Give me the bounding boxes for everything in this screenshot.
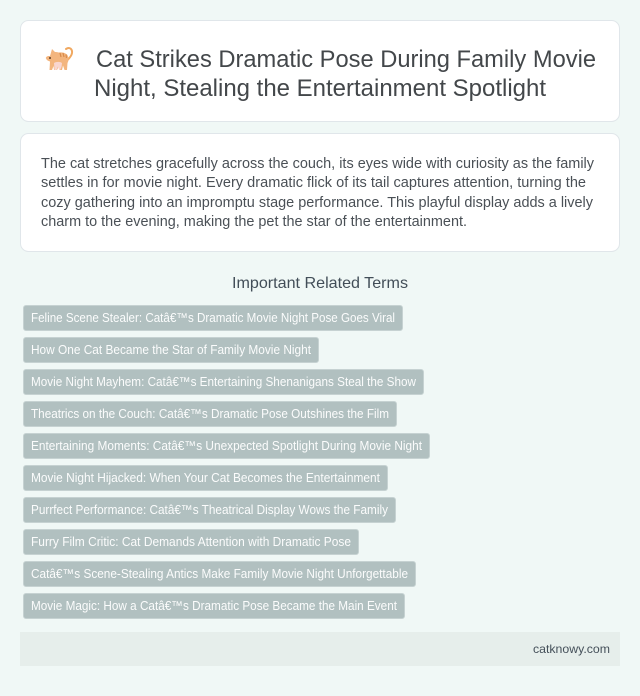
tag 5 xyxy=(24,434,430,458)
title text: Cat Strikes Dramatic Pose During Family Movie xyxy=(96,46,596,73)
tag 3: Movie Night Mayhem: Catâ€™s Entertaining Shenanigans Steal the Show xyxy=(31,375,417,389)
heading: important related terms: Important Related Terms xyxy=(232,275,408,292)
tag 8: Furry Film Critic: Cat Demands Attention with Dramatic Pose xyxy=(31,535,351,549)
description text: settles in for movie night. Every dramatic flick of its tail captures attention, turning the xyxy=(41,174,586,191)
tag 2: How One Cat Became the Star of Family Movie Night xyxy=(31,343,311,357)
tag 5: Entertaining Moments: Catâ€™s Unexpected Spotlight During Movie Night xyxy=(31,439,422,453)
icon: cat xyxy=(46,48,72,70)
tag 6 xyxy=(24,466,388,490)
description text: The cat stretches gracefully across the couch, its eyes wide with curiosity as the family xyxy=(41,155,594,172)
panel: title xyxy=(20,20,620,122)
title text xyxy=(94,46,596,102)
tag 7 xyxy=(24,498,396,522)
tag 4 xyxy=(24,402,396,426)
footer source: catknowy.com xyxy=(533,642,610,656)
title text: Night, Stealing the Entertainment Spotlight xyxy=(94,75,546,102)
tag 1: Feline Scene Stealer: Catâ€™s Dramatic Movie Night Pose Goes Viral xyxy=(31,311,395,325)
tag 9 xyxy=(24,562,416,586)
footer xyxy=(20,632,620,666)
tag 4: Theatrics on the Couch: Catâ€™s Dramatic Pose Outshines the Film xyxy=(31,407,389,421)
tag 1 xyxy=(24,306,402,330)
description text: charm to the evening, making the pet the star of the entertainment. xyxy=(41,213,467,230)
panel: description xyxy=(20,134,620,252)
tag 10: Movie Magic: How a Catâ€™s Dramatic Pose Became the Main Event xyxy=(31,599,397,613)
tag list xyxy=(24,306,430,618)
description text xyxy=(41,155,594,230)
tag 8 xyxy=(24,530,358,554)
tag 2 xyxy=(24,338,318,362)
description text: cozy gathering into an impromptu stage performance. This playful display adds a lively xyxy=(41,194,593,211)
tag 6: Movie Night Hijacked: When Your Cat Becomes the Entertainment xyxy=(31,471,380,485)
tag 9: Catâ€™s Scene-Stealing Antics Make Family Movie Night Unforgettable xyxy=(31,567,408,581)
tag 10 xyxy=(24,594,404,618)
tag 7: Purrfect Performance: Catâ€™s Theatrical Display Wows the Family xyxy=(31,503,389,517)
tag 3 xyxy=(24,370,424,394)
